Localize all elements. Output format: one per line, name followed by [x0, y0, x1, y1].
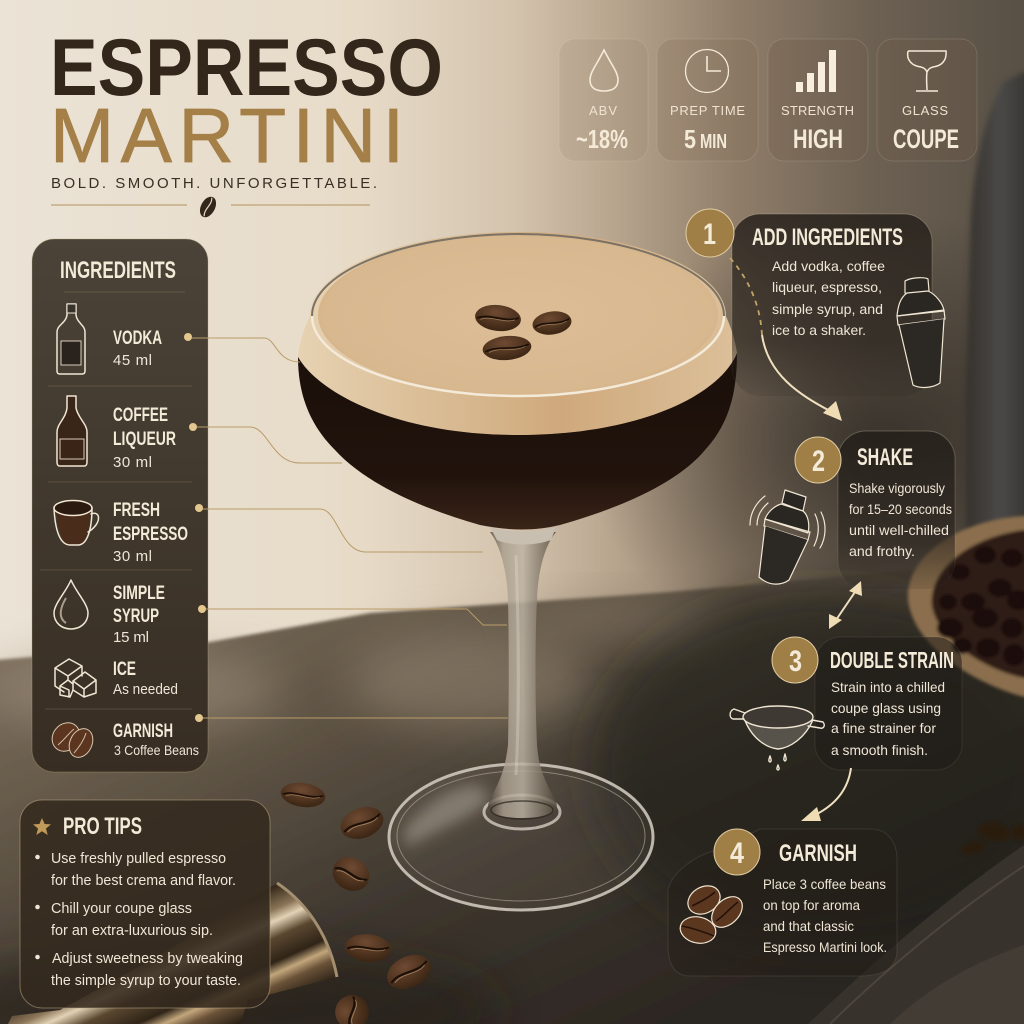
- ingredient: garnish: 3 Coffee Beans: [114, 742, 199, 758]
- tips list: Chill your coupe glass: [51, 901, 192, 917]
- ingredient: coffee liqueur: [57, 396, 176, 471]
- ingredient: fresh espresso: 30 ml: [113, 548, 152, 565]
- stat cards: [559, 39, 977, 161]
- step 3 body: coupe glass using: [831, 700, 941, 716]
- step 4 body: on top for aroma: [763, 897, 860, 913]
- arrow: step 1 to 2: [730, 258, 842, 421]
- stat: glass: GLASS: [902, 103, 948, 118]
- step 1: add ingredients: [686, 209, 945, 396]
- ingredient: garnish: GARNISH: [113, 721, 173, 742]
- icon: fine strainer: [730, 706, 824, 770]
- cloth napkin: [808, 845, 1024, 1024]
- step 4: garnish: [668, 829, 897, 976]
- step number 4: [714, 829, 760, 875]
- stat: glass: COUPE: [893, 124, 959, 154]
- panel: ingredients: [32, 239, 208, 772]
- step 3 body: a smooth finish.: [831, 742, 928, 758]
- icon: star: [33, 818, 51, 835]
- ingredient: ice: As needed: [113, 681, 178, 698]
- step number 3: [772, 637, 818, 683]
- three garnish beans: [474, 303, 573, 362]
- leader lines: [188, 338, 508, 718]
- ingredient: vodka: 45 ml: [113, 352, 152, 369]
- step 2 body: until well-chilled: [849, 522, 949, 538]
- bar jigger: [8, 883, 337, 1024]
- stat: strength: [768, 39, 868, 161]
- stat: ABV: ~18%: [576, 124, 628, 154]
- ingredient: ice: ICE: [113, 659, 136, 680]
- arrow: step 3 to 4: [801, 768, 851, 821]
- step 3 body: Strain into a chilled: [831, 679, 945, 695]
- step 2 body: and frothy.: [849, 543, 915, 559]
- step 3: double strain: DOUBLE STRAIN: [830, 647, 954, 673]
- title: ESPRESSO: [50, 23, 443, 113]
- crema side band: [298, 232, 737, 435]
- step 1 body: Add vodka, coffee: [772, 258, 885, 274]
- step 2 body: Shake vigorously: [849, 480, 945, 496]
- cocktail shaker in background: [966, 72, 1024, 530]
- tips list: for the best crema and flavor.: [51, 873, 236, 889]
- step 1 body: ice to a shaker.: [772, 322, 866, 338]
- ingredient: fresh espresso: [54, 500, 188, 565]
- title: [50, 23, 443, 205]
- glass joint highlight: [490, 527, 556, 544]
- stat: prep time: PREP TIME: [670, 103, 745, 118]
- tips list: the simple syrup to your taste.: [51, 973, 241, 989]
- step 1: add ingredients: ADD INGREDIENTS: [752, 224, 903, 251]
- crema top: [318, 235, 718, 395]
- ingredient: vodka: VODKA: [113, 328, 162, 349]
- title: BOLD. SMOOTH. UNFORGETTABLE.: [51, 175, 377, 192]
- step 4 body: [763, 876, 887, 955]
- step 1 body: [772, 258, 885, 338]
- ingredient: simple syrup: SIMPLE: [113, 583, 165, 604]
- step number 2: [795, 437, 841, 483]
- step number 1: 1: [703, 218, 716, 251]
- ingredient: coffee liqueur: 30 ml: [113, 454, 152, 471]
- icon: shaking shaker: [750, 490, 825, 584]
- step 3 body: a fine strainer for: [831, 720, 936, 736]
- step 4: garnish: GARNISH: [779, 840, 857, 867]
- step 2: shake: [750, 431, 955, 589]
- scattered coffee beans: [279, 780, 436, 1024]
- step 4 body: Place 3 coffee beans: [763, 876, 886, 892]
- stat: glass: [877, 39, 977, 161]
- ingredient: coffee liqueur: LIQUEUR: [113, 429, 176, 450]
- step 2 body: [849, 480, 952, 559]
- step number 1: [686, 209, 734, 257]
- step number 4: 4: [730, 837, 744, 870]
- stat: strength: HIGH: [793, 124, 843, 154]
- step 3 body: [831, 679, 945, 758]
- heading: ingredients: INGREDIENTS: [60, 257, 176, 284]
- ingredient: vodka: [57, 304, 162, 374]
- arrow: step 2 to 3: [829, 581, 862, 629]
- background beans on the table: [960, 821, 1024, 857]
- glass rim: [312, 234, 724, 396]
- step 2 body: for 15–20 seconds: [849, 501, 952, 517]
- ingredient: ice: [55, 659, 178, 698]
- step 2: shake: SHAKE: [857, 444, 913, 471]
- heading: pro tips: PRO TIPS: [63, 813, 142, 840]
- dark coffee bowl: [298, 353, 737, 530]
- tips list: Use freshly pulled espresso: [51, 851, 226, 867]
- ingredient: coffee liqueur: COFFEE: [113, 405, 168, 426]
- step 3: double strain: [730, 637, 962, 770]
- ingredient: fresh espresso: FRESH: [113, 500, 160, 521]
- ingredient: garnish: [46, 717, 199, 761]
- ingredient: simple syrup: 15 ml: [113, 629, 149, 646]
- ingredient: simple syrup: [54, 580, 165, 646]
- step number 3: 3: [789, 645, 802, 678]
- ingredient: simple syrup: SYRUP: [113, 606, 159, 627]
- step 1 body: liqueur, espresso,: [772, 279, 882, 295]
- icon: shaker: [897, 278, 945, 387]
- step 4 body: and that classic: [763, 918, 854, 934]
- martini glass: [298, 232, 737, 910]
- step 1 body: simple syrup, and: [772, 301, 883, 317]
- stat: prep time: MIN: [700, 131, 727, 153]
- step number 2: 2: [812, 445, 825, 478]
- stat: ABV: [559, 39, 648, 161]
- tips list: Adjust sweetness by tweaking: [52, 951, 243, 967]
- ingredient: fresh espresso: ESPRESSO: [113, 524, 188, 545]
- stat: prep time: [657, 39, 758, 161]
- stat: prep time: 5: [684, 124, 696, 154]
- tips list: for an extra-luxurious sip.: [51, 923, 213, 939]
- panel: pro tips: [20, 800, 270, 1008]
- glass foot and stem: [389, 532, 653, 910]
- leader dots: [184, 333, 206, 722]
- bowl of coffee beans: [908, 516, 1024, 697]
- tips list: [35, 851, 243, 989]
- icon: title coffee bean: [197, 194, 219, 220]
- stat: strength: STRENGTH: [781, 103, 854, 118]
- stat: ABV: ABV: [589, 103, 617, 118]
- step 4 body: Espresso Martini look.: [763, 939, 887, 955]
- title: MARTINI: [50, 93, 404, 179]
- icon: three coffee beans: [678, 880, 748, 946]
